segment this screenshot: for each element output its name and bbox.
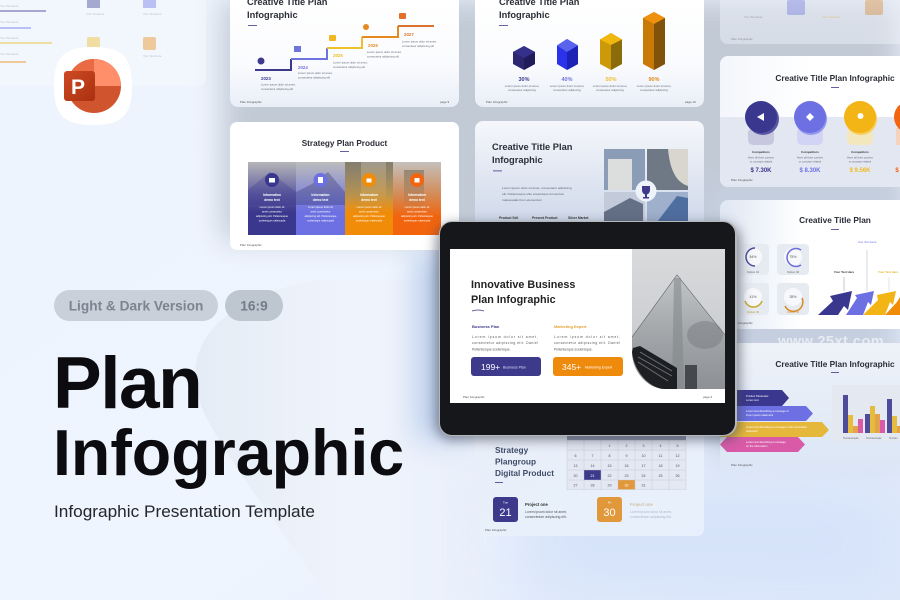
- project two text: consectetuer adipiscing elit.: [630, 515, 672, 519]
- calendar: 26: [676, 474, 680, 478]
- percent labels: 50%: [605, 77, 617, 83]
- column text: Lorem ipsum dolor sit: [260, 205, 285, 209]
- calendar: 9: [626, 454, 628, 458]
- calendar: 3: [642, 444, 644, 448]
- step line chart: [255, 26, 434, 70]
- calendar: 6: [574, 454, 576, 458]
- project two text: [630, 502, 672, 519]
- heading: Infographic: [492, 155, 543, 165]
- column: marketing expert: Pellentesque scelerisque.: [554, 348, 593, 352]
- column text: Information: [263, 193, 281, 197]
- column text: adipiscing elit. Pellentesque: [256, 214, 289, 218]
- step descriptions: Lorem ipsum dolor sit amet,: [261, 82, 296, 86]
- column text: Lorem ipsum dolor sit: [308, 205, 333, 209]
- project one text: consectetuer adipiscing elit.: [525, 515, 567, 519]
- calendar: 23: [624, 474, 628, 478]
- arrow labels: Your Text Here: [834, 270, 854, 274]
- competitor labels: Competitors: [752, 150, 770, 154]
- date card: 21: [493, 497, 518, 522]
- panel: progress and arrows slide: [720, 200, 900, 329]
- competitor labels: Here all their content: [847, 156, 873, 160]
- calendar: 27: [574, 484, 578, 488]
- calendar: 11: [659, 454, 662, 458]
- bar descriptions: Lorem ipsum dolor sit amet,: [505, 84, 539, 88]
- arrow list: Lorem text describing a message: [746, 440, 786, 444]
- date card: 30: Fri: [608, 500, 612, 504]
- step descriptions: consectetur adipiscing elit: [298, 76, 330, 80]
- percent labels: 90%: [648, 77, 660, 83]
- step descriptions: consectetur adipiscing elit: [402, 44, 434, 48]
- bar descriptions: consectetur adipiscing: [640, 88, 668, 92]
- progress bars: Your Text Here: [0, 52, 19, 56]
- paragraph: [502, 186, 572, 202]
- column text: adipiscing elit. Pellentesque: [353, 214, 386, 218]
- column text: demo text: [409, 198, 426, 202]
- calendar: 2: [626, 444, 628, 448]
- calendar: 1: [608, 444, 610, 448]
- heading: Plangroup: [495, 456, 536, 466]
- progress bars: Your Text Here: [0, 4, 19, 8]
- calendar: 31: [642, 484, 646, 488]
- stat button: 199+: Business Plan: [503, 366, 526, 370]
- stat button: 345+: Marketing Expert: [585, 366, 612, 370]
- heading: Creative Title Plan Infographic: [775, 359, 895, 369]
- feature icons: Your Text Here: [143, 12, 162, 16]
- paragraph: malesuadas from elementum: [502, 198, 542, 202]
- competitor labels: or concept related: [799, 160, 822, 164]
- column text: Lorem ipsum dolor sit: [357, 205, 382, 209]
- donut tiles: Option 02: [787, 270, 800, 274]
- column text: adipiscing elit. Pellentesque: [304, 214, 337, 218]
- arrow chart: [818, 250, 900, 315]
- panel: faded left slide: [0, 0, 206, 86]
- panel: faded top-right slide: [720, 0, 900, 44]
- donut tiles: Option 03: [747, 310, 760, 314]
- column text: demo text: [313, 198, 329, 202]
- icon: PowerPoint logo: [54, 47, 132, 125]
- arrow labels: [834, 240, 899, 274]
- arrow list: statement: [746, 429, 758, 433]
- step labels: 2023: [261, 76, 271, 81]
- badge: light and dark version: Light & Dark Version: [69, 298, 203, 314]
- date card: 30: [597, 497, 622, 522]
- step labels: 2025: [333, 53, 343, 58]
- calendar: 7: [592, 454, 594, 458]
- feature icons: Your Text Here: [143, 54, 162, 58]
- slide screen: [450, 249, 725, 403]
- panel: calendar slide: Plan Infographic: [485, 528, 507, 532]
- four image columns: [248, 162, 441, 235]
- 3D bar chart: [513, 12, 665, 70]
- column text: adipiscing elit. Pellentesque: [401, 214, 434, 218]
- heading: Infographic: [499, 10, 550, 20]
- calendar: 25: [658, 474, 662, 478]
- bar chart: Text Example: [843, 436, 859, 440]
- column text: [256, 193, 434, 222]
- product labels: Silver Market: [568, 216, 589, 220]
- calendar: 15: [608, 464, 612, 468]
- watermark: www.25xt.com: [777, 334, 884, 350]
- panel: 3D bars slide: Plan Infographic: [486, 100, 508, 104]
- competitor labels: Here all their content: [748, 156, 774, 160]
- panel: progress and arrows slide: Plan Infographic: [731, 321, 753, 325]
- slide screen: Plan Infographic: [463, 395, 485, 399]
- calendar: 8: [608, 454, 610, 458]
- competitor labels: or concept related: [849, 160, 872, 164]
- competitor labels: Competitors: [801, 150, 819, 154]
- calendar: 29: [608, 484, 612, 488]
- arrow list: lorem ipsum statement: [746, 413, 773, 417]
- panel: faded top-right slide: Your Text Here: [822, 15, 841, 19]
- calendar: 20: [574, 474, 578, 478]
- column icons: [265, 173, 424, 187]
- feature icons: [86, 0, 162, 58]
- step descriptions: consectetur adipiscing elit: [261, 87, 293, 91]
- step descriptions: consectetur adipiscing elit: [333, 65, 365, 69]
- bar descriptions: Lorem ipsum dolor sit amet,: [550, 84, 584, 88]
- column text: demo text: [264, 198, 281, 202]
- circle icons: [745, 101, 900, 145]
- column text: demo text: [361, 198, 378, 202]
- calendar: 28: [590, 484, 594, 488]
- calendar: 19: [676, 464, 680, 468]
- calendar: 18: [658, 464, 662, 468]
- slide screen: page 6: [703, 395, 713, 399]
- column text: amet consectetur: [407, 210, 427, 214]
- competitor labels: $ 7.30K: [750, 168, 772, 174]
- panel: 3D bars slide: [475, 0, 704, 107]
- column text: scelerisque malesuada: [356, 218, 383, 222]
- arrow list: Product Parameter: [746, 394, 769, 398]
- column: business plan: Business Plan: [472, 324, 500, 329]
- heading: Plan Infographic: [471, 294, 556, 306]
- column: business plan: Pellentesque scelerisque.: [472, 348, 511, 352]
- calendar: 21: [590, 474, 594, 478]
- date card: 21: 21: [499, 507, 512, 519]
- date card: 21: Tue: [503, 500, 508, 504]
- donut tiles: Option 04: [787, 310, 800, 314]
- column: business plan: consectetur adipiscing elit. Daniel: [472, 341, 538, 345]
- column: marketing expert: Marketing Expert: [554, 324, 587, 329]
- subtitle: Infographic Presentation Template: [54, 502, 315, 521]
- product labels: Product Sell: [499, 216, 518, 220]
- project one text: Project one: [525, 502, 548, 507]
- column text: scelerisque malesuada: [404, 218, 431, 222]
- column: business plan: Lorem ipsum dolor sit amet,: [472, 335, 538, 339]
- project two text: Lorem ipsum dolor sit amet,: [630, 510, 672, 514]
- bar descriptions: consectetur adipiscing: [508, 88, 536, 92]
- panel: arrow list and bars slide: Plan Infographic: [731, 463, 753, 467]
- panel: arrow list and bars slide: [720, 343, 900, 471]
- step descriptions: consectetur adipiscing elit: [367, 54, 399, 58]
- competitor labels: [748, 150, 899, 174]
- column text: Information: [360, 193, 378, 197]
- donut tiles: 35%: [789, 295, 797, 299]
- panel: image collage slide: [475, 121, 704, 246]
- donut tiles: 41%: [749, 295, 757, 299]
- icon: trophy: [636, 180, 656, 202]
- arrow labels: Your Text Here: [858, 240, 877, 244]
- calendar: 17: [642, 464, 646, 468]
- step labels: 2024: [298, 65, 308, 70]
- column text: Information: [408, 193, 426, 197]
- step descriptions: [261, 40, 437, 91]
- step descriptions: Lorem ipsum dolor sit amet,: [402, 40, 437, 44]
- heading: Creative Title Plan: [492, 142, 573, 152]
- bar chart: Text Example: [866, 436, 882, 440]
- column: business plan: [472, 324, 538, 352]
- donut tiles: 54%: [749, 255, 757, 259]
- column text: scelerisque malesuada: [307, 218, 334, 222]
- main title: Plan: [53, 343, 201, 424]
- stat button: 345+: [553, 357, 623, 376]
- image collage: [604, 149, 688, 222]
- panel: timeline slide: [230, 0, 459, 107]
- progress bars: Your Text Here: [0, 20, 19, 24]
- panel: faded top-right slide: Plan Infographic: [731, 37, 753, 41]
- arrow list: Lorem text describing a message in the information: [746, 425, 807, 429]
- paragraph: Lorem ipsum dolor sit amet, consectetur adipiscing: [502, 186, 572, 190]
- step labels: 2027: [404, 32, 414, 37]
- step descriptions: Lorem ipsum dolor sit amet,: [367, 50, 402, 54]
- arrow list: on the information: [746, 444, 768, 448]
- heading: Strategy Plan Product: [302, 139, 388, 148]
- project one text: [525, 502, 567, 519]
- panel: 3D bars slide: page 10: [685, 100, 696, 104]
- column text: scelerisque malesuada: [259, 218, 286, 222]
- panel: competitors slide: [720, 56, 900, 187]
- column text: amet consectetur: [311, 210, 331, 214]
- bar descriptions: Lorem ipsum dolor sit amet,: [637, 84, 671, 88]
- icon: PowerPoint logo: P: [71, 76, 85, 99]
- calendar: 10: [642, 454, 646, 458]
- bar descriptions: consectetur adipiscing: [553, 88, 581, 92]
- building photo: [632, 249, 725, 389]
- panel: faded top-right slide: Your Text Here: [744, 15, 763, 19]
- donut tiles: 75%: [789, 255, 797, 259]
- heading: Creative Title Plan Infographic: [775, 73, 895, 83]
- badge: light and dark version: [54, 290, 218, 321]
- percent labels: 30%: [518, 77, 530, 83]
- project one text: Lorem ipsum dolor sit amet,: [525, 510, 567, 514]
- competitor labels: Here all their content: [797, 156, 823, 160]
- bar descriptions: [505, 84, 671, 92]
- calendar: [567, 430, 686, 490]
- arrow labels: Your Text Here: [878, 270, 899, 274]
- arrow list: [720, 390, 829, 452]
- heading: Innovative Business: [471, 279, 575, 291]
- tablet mockup: [436, 221, 740, 440]
- panel: competitors slide: Plan Infographic: [731, 178, 753, 182]
- heading: Strategy: [495, 445, 529, 455]
- stat button: 199+: 199+: [481, 362, 500, 372]
- calendar: 14: [590, 464, 594, 468]
- heading: Digital Product: [495, 468, 554, 478]
- calendar: 30: [624, 484, 628, 488]
- arrow list: Lorem text describing a message of: [746, 409, 789, 413]
- product labels: Present Product: [532, 216, 558, 220]
- percent labels: [518, 77, 660, 83]
- donut tiles: Option 01: [747, 270, 760, 274]
- bar descriptions: Lorem ipsum dolor sit amet,: [593, 84, 627, 88]
- panel: strategy slide: [230, 122, 459, 250]
- product labels: [499, 216, 589, 220]
- heading: Infographic: [247, 10, 298, 20]
- column text: amet consectetur: [262, 210, 282, 214]
- step descriptions: Lorem ipsum dolor sit amet,: [298, 71, 333, 75]
- panel: calendar slide: [475, 410, 704, 536]
- feature icons: Your Text Here: [86, 12, 105, 16]
- donut tiles: [737, 244, 809, 315]
- panel: timeline slide: page 9: [440, 100, 450, 104]
- bar descriptions: consectetur adipiscing: [596, 88, 624, 92]
- step labels: [261, 32, 414, 81]
- column: marketing expert: [554, 324, 620, 352]
- arrow list: Lorem text: [746, 398, 759, 402]
- column: marketing expert: consectetur adipiscing elit. Daniel: [554, 341, 620, 345]
- competitor labels: $ 9.56K: [849, 168, 871, 174]
- panel: strategy slide: Plan Infographic: [240, 243, 262, 247]
- progress bars: Your Text Here: [0, 36, 19, 40]
- calendar: 5: [676, 444, 678, 448]
- step labels: 2026: [368, 43, 378, 48]
- competitor labels: Competitors: [851, 150, 869, 154]
- competitor labels: $: [895, 168, 899, 174]
- bar chart: [832, 385, 900, 441]
- stat button: 199+: [471, 357, 541, 376]
- paragraph: elit. Pellentesque elite scelerisque fermentum: [502, 192, 565, 196]
- calendar: 13: [574, 464, 578, 468]
- main title: Infographic: [53, 417, 404, 489]
- competitor labels: $ 8.30K: [799, 168, 821, 174]
- step descriptions: Lorem ipsum dolor sit amet,: [333, 60, 368, 64]
- badge: aspect ratio: [225, 290, 283, 321]
- badge: aspect ratio: 16:9: [240, 298, 268, 314]
- step icons: [258, 13, 406, 64]
- calendar: 22: [608, 474, 612, 478]
- calendar: 12: [676, 454, 680, 458]
- percent labels: 40%: [561, 77, 573, 83]
- column text: amet consectetur: [359, 210, 379, 214]
- column text: Lorem ipsum dolor sit: [405, 205, 430, 209]
- calendar: 4: [660, 444, 662, 448]
- stat button: 345+: 345+: [562, 362, 581, 372]
- heading: Creative Title Plan: [799, 215, 871, 225]
- calendar: 24: [642, 474, 646, 478]
- bar chart: Text Ex: [889, 436, 898, 440]
- date card: 30: 30: [603, 507, 616, 519]
- panel: timeline slide: Plan Infographic: [240, 100, 262, 104]
- column text: Information: [311, 193, 330, 197]
- column: marketing expert: Lorem ipsum dolor sit amet,: [554, 335, 620, 339]
- progress bars: [0, 4, 52, 63]
- competitor labels: or concept related: [750, 160, 773, 164]
- project two text: Project one: [630, 502, 653, 507]
- calendar: 16: [624, 464, 628, 468]
